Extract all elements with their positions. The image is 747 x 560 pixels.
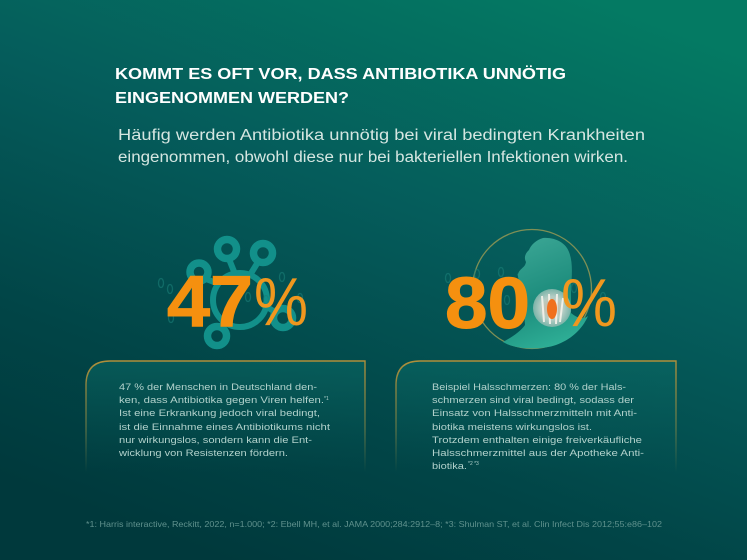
panel text: biotika. — [432, 461, 467, 472]
panel text: Trotzdem enthalten einige freiverkäufliche — [432, 435, 642, 446]
panel text: Einsatz von Halsschmerzmitteln mit Anti- — [432, 408, 637, 419]
panel text: Beispiel Halsschmerzen: 80 % der Hals- — [432, 382, 626, 393]
panel text: Ist eine Erkrankung jedoch viral bedingt, — [119, 408, 320, 419]
panel text — [432, 382, 644, 472]
percent sign: % — [254, 264, 308, 340]
panel frame — [396, 361, 676, 472]
title: EINGENOMMEN WERDEN? — [115, 90, 349, 107]
panel text: wicklung von Resistenzen fördern. — [118, 448, 288, 459]
panel text: schmerzen sind viral bedingt, sodass der — [432, 395, 635, 406]
footnote: *1: Harris interactive, Reckitt, 2022, n=1.000; *2: Ebell MH, et al. JAMA 2000;284:2912–8; *3: Shulman ST, et al. Clin Infect Dis 2012;55:e86–102 — [86, 520, 662, 529]
title: KOMMT ES OFT VOR, DASS ANTIBIOTIKA UNNÖTIG — [115, 64, 566, 83]
panel text: Halsschmerzmittel aus der Apotheke Anti- — [432, 448, 644, 459]
panel text: *1 — [324, 396, 329, 402]
panel text: *2 *3 — [468, 461, 479, 467]
panel text: nur wirkungslos, sondern kann die Ent- — [119, 435, 312, 446]
panel text: 47 % der Menschen in Deutschland den- — [119, 382, 317, 393]
stat: 47 percent with virus icon — [158, 240, 308, 346]
panel text — [118, 382, 330, 459]
stat: 80 percent with head icon — [445, 230, 617, 348]
number: 80: 80 — [445, 264, 530, 344]
intro text — [118, 127, 645, 166]
panel text: biotika meistens wirkungslos ist. — [432, 422, 592, 433]
intro text: Häufig werden Antibiotika unnötig bei viral bedingten Krankheiten — [118, 127, 645, 144]
title — [115, 64, 566, 107]
panel text: ist die Einnahme eines Antibiotikums nicht — [119, 422, 330, 433]
number: 47: 47 — [167, 262, 253, 342]
icon: virus — [158, 240, 302, 346]
panel frame — [86, 361, 365, 472]
percent sign: % — [561, 265, 617, 341]
panel: 80 percent explanation — [396, 361, 676, 472]
intro text: eingenommen, obwohl diese nur bei bakteriellen Infektionen wirken. — [118, 149, 628, 166]
icon: head with sore throat — [446, 230, 606, 348]
panel text: ken, dass Antibiotika gegen Viren helfen. — [119, 395, 324, 406]
panel: 47 percent explanation — [86, 361, 365, 472]
